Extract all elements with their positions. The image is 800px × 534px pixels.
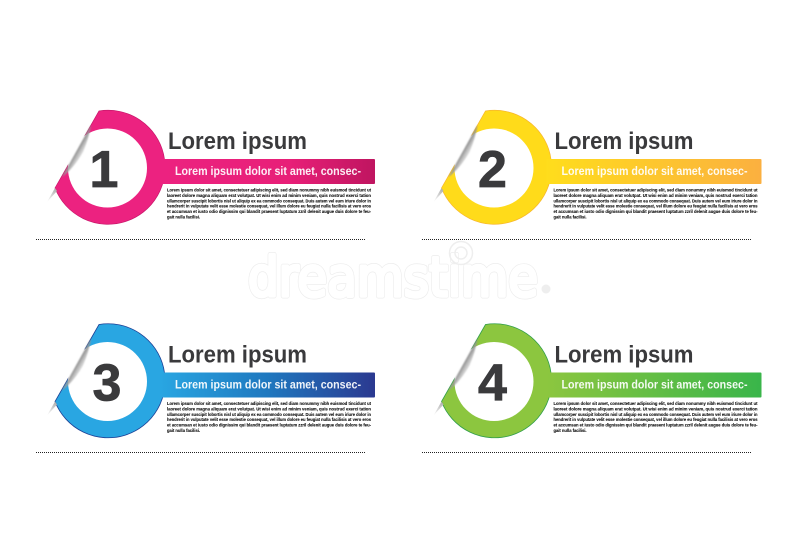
heading 4: Lorem ipsum [554, 342, 694, 368]
body text 1: Lorem ipsum dolor sit amet, consectetuer adipiscing elit, sed diam nonummy nibh euismod tincidunt ut [167, 188, 371, 192]
icon: peeled circle 4 [434, 324, 552, 438]
body text 3: ullamcorper suscipit lobortis nisl ut aliquip ex ea commodo consequat. Duis autem vel eum iriure dolor in [167, 412, 371, 417]
subtitle bar 1 [160, 159, 375, 184]
subtitle bar 3 [160, 372, 375, 398]
body text 3: laoreet dolore magna aliquam erat volutpat. Ut wisi enim ad minim veniam, quis nostrud exerci tation [167, 406, 371, 412]
watermark: dreamstime [248, 246, 538, 309]
body text 4 [554, 401, 758, 433]
body text 4: hendrerit in vulputate velit esse molestie consequat, vel illum dolore eu feugiat nulla facilisis at vero eros [554, 417, 758, 422]
body text 4: laoreet dolore magna aliquam erat volutpat. Ut wisi enim ad minim veniam, quis nostrud exerci tation [554, 406, 758, 412]
body text 2: ullamcorper suscipit lobortis nisl ut aliquip ex ea commodo consequat. Duis autem vel eum iriure dolor in [554, 198, 758, 203]
subtitle text 4: Lorem ipsum dolor sit amet, consec- [562, 378, 748, 392]
number 4: 4 [478, 354, 507, 412]
panel: step 3 [36, 324, 375, 452]
panel: step 2 [422, 110, 762, 239]
body text 2: hendrerit in vulputate velit esse molestie consequat, vel illum dolore eu feugiat nulla facilisis at vero eros [554, 204, 758, 208]
icon: peeled circle 2 [434, 110, 552, 224]
body text 2: et accumsan et iusto odio dignissim qui blandit praesent luptatum zzril delenit augue duis dolore te feu- [554, 209, 758, 214]
body text 3: gait nulla facilisi. [167, 428, 200, 433]
panel: step 4 [422, 324, 762, 452]
body text 1: gait nulla facilisi. [167, 214, 200, 220]
icon: peeled circle 3 [47, 324, 165, 438]
heading 3: Lorem ipsum [168, 342, 307, 368]
body text 3: Lorem ipsum dolor sit amet, consectetuer adipiscing elit, sed diam nonummy nibh euismod tincidunt ut [167, 401, 371, 406]
body text 2: Lorem ipsum dolor sit amet, consectetuer adipiscing elit, sed diam nonummy nibh euismod tincidunt ut [554, 188, 758, 192]
body text 4: et accumsan et iusto odio dignissim qui blandit praesent luptatum zzril delenit augue duis dolore te feu- [554, 422, 758, 428]
heading 2: Lorem ipsum [554, 128, 694, 155]
body text 2: laoreet dolore magna aliquam erat volutpat. Ut wisi enim ad minim veniam, quis nostrud exerci tation [554, 193, 758, 198]
body text 3: et accumsan et iusto odio dignissim qui blandit praesent luptatum zzril delenit augue duis dolore te feu- [167, 422, 371, 428]
number 2: 2 [478, 141, 507, 199]
subtitle text 1: Lorem ipsum dolor sit amet, consec- [175, 164, 361, 178]
body text 4: Lorem ipsum dolor sit amet, consectetuer adipiscing elit, sed diam nonummy nibh euismod tincidunt ut [554, 401, 758, 406]
body text 4: ullamcorper suscipit lobortis nisl ut aliquip ex ea commodo consequat. Duis autem vel eum iriure dolor in [554, 412, 758, 417]
body text 2: gait nulla facilisi. [554, 214, 586, 220]
number 3: 3 [93, 354, 121, 412]
subtitle bar 2 [546, 159, 762, 184]
panel: step 1 [36, 110, 375, 239]
body text 1: hendrerit in vulputate velit esse molestie consequat, vel illum dolore eu feugiat nulla facilisis at vero eros [167, 204, 371, 208]
icon: peeled circle 1 [47, 110, 165, 224]
subtitle text 3: Lorem ipsum dolor sit amet, consec- [175, 378, 361, 392]
number 1: 1 [90, 141, 118, 199]
body text 4: gait nulla facilisi. [554, 428, 586, 433]
body text 3 [167, 401, 371, 433]
body text 1: et accumsan et iusto odio dignissim qui blandit praesent luptatum zzril delenit augue duis dolore te feu- [167, 209, 371, 214]
subtitle text 2: Lorem ipsum dolor sit amet, consec- [562, 164, 748, 178]
body text 3: hendrerit in vulputate velit esse molestie consequat, vel illum dolore eu feugiat nulla facilisis at vero eros [167, 417, 371, 422]
heading 1: Lorem ipsum [168, 128, 307, 155]
body text 1: laoreet dolore magna aliquam erat volutpat. Ut wisi enim ad minim veniam, quis nostrud exerci tation [167, 193, 371, 198]
body text 2 [554, 188, 758, 220]
watermark: dreamstime [248, 246, 538, 309]
body text 1 [167, 188, 371, 220]
subtitle bar 4 [546, 372, 762, 398]
body text 1: ullamcorper suscipit lobortis nisl ut aliquip ex ea commodo consequat. Duis autem vel eum iriure dolor in [167, 198, 371, 203]
